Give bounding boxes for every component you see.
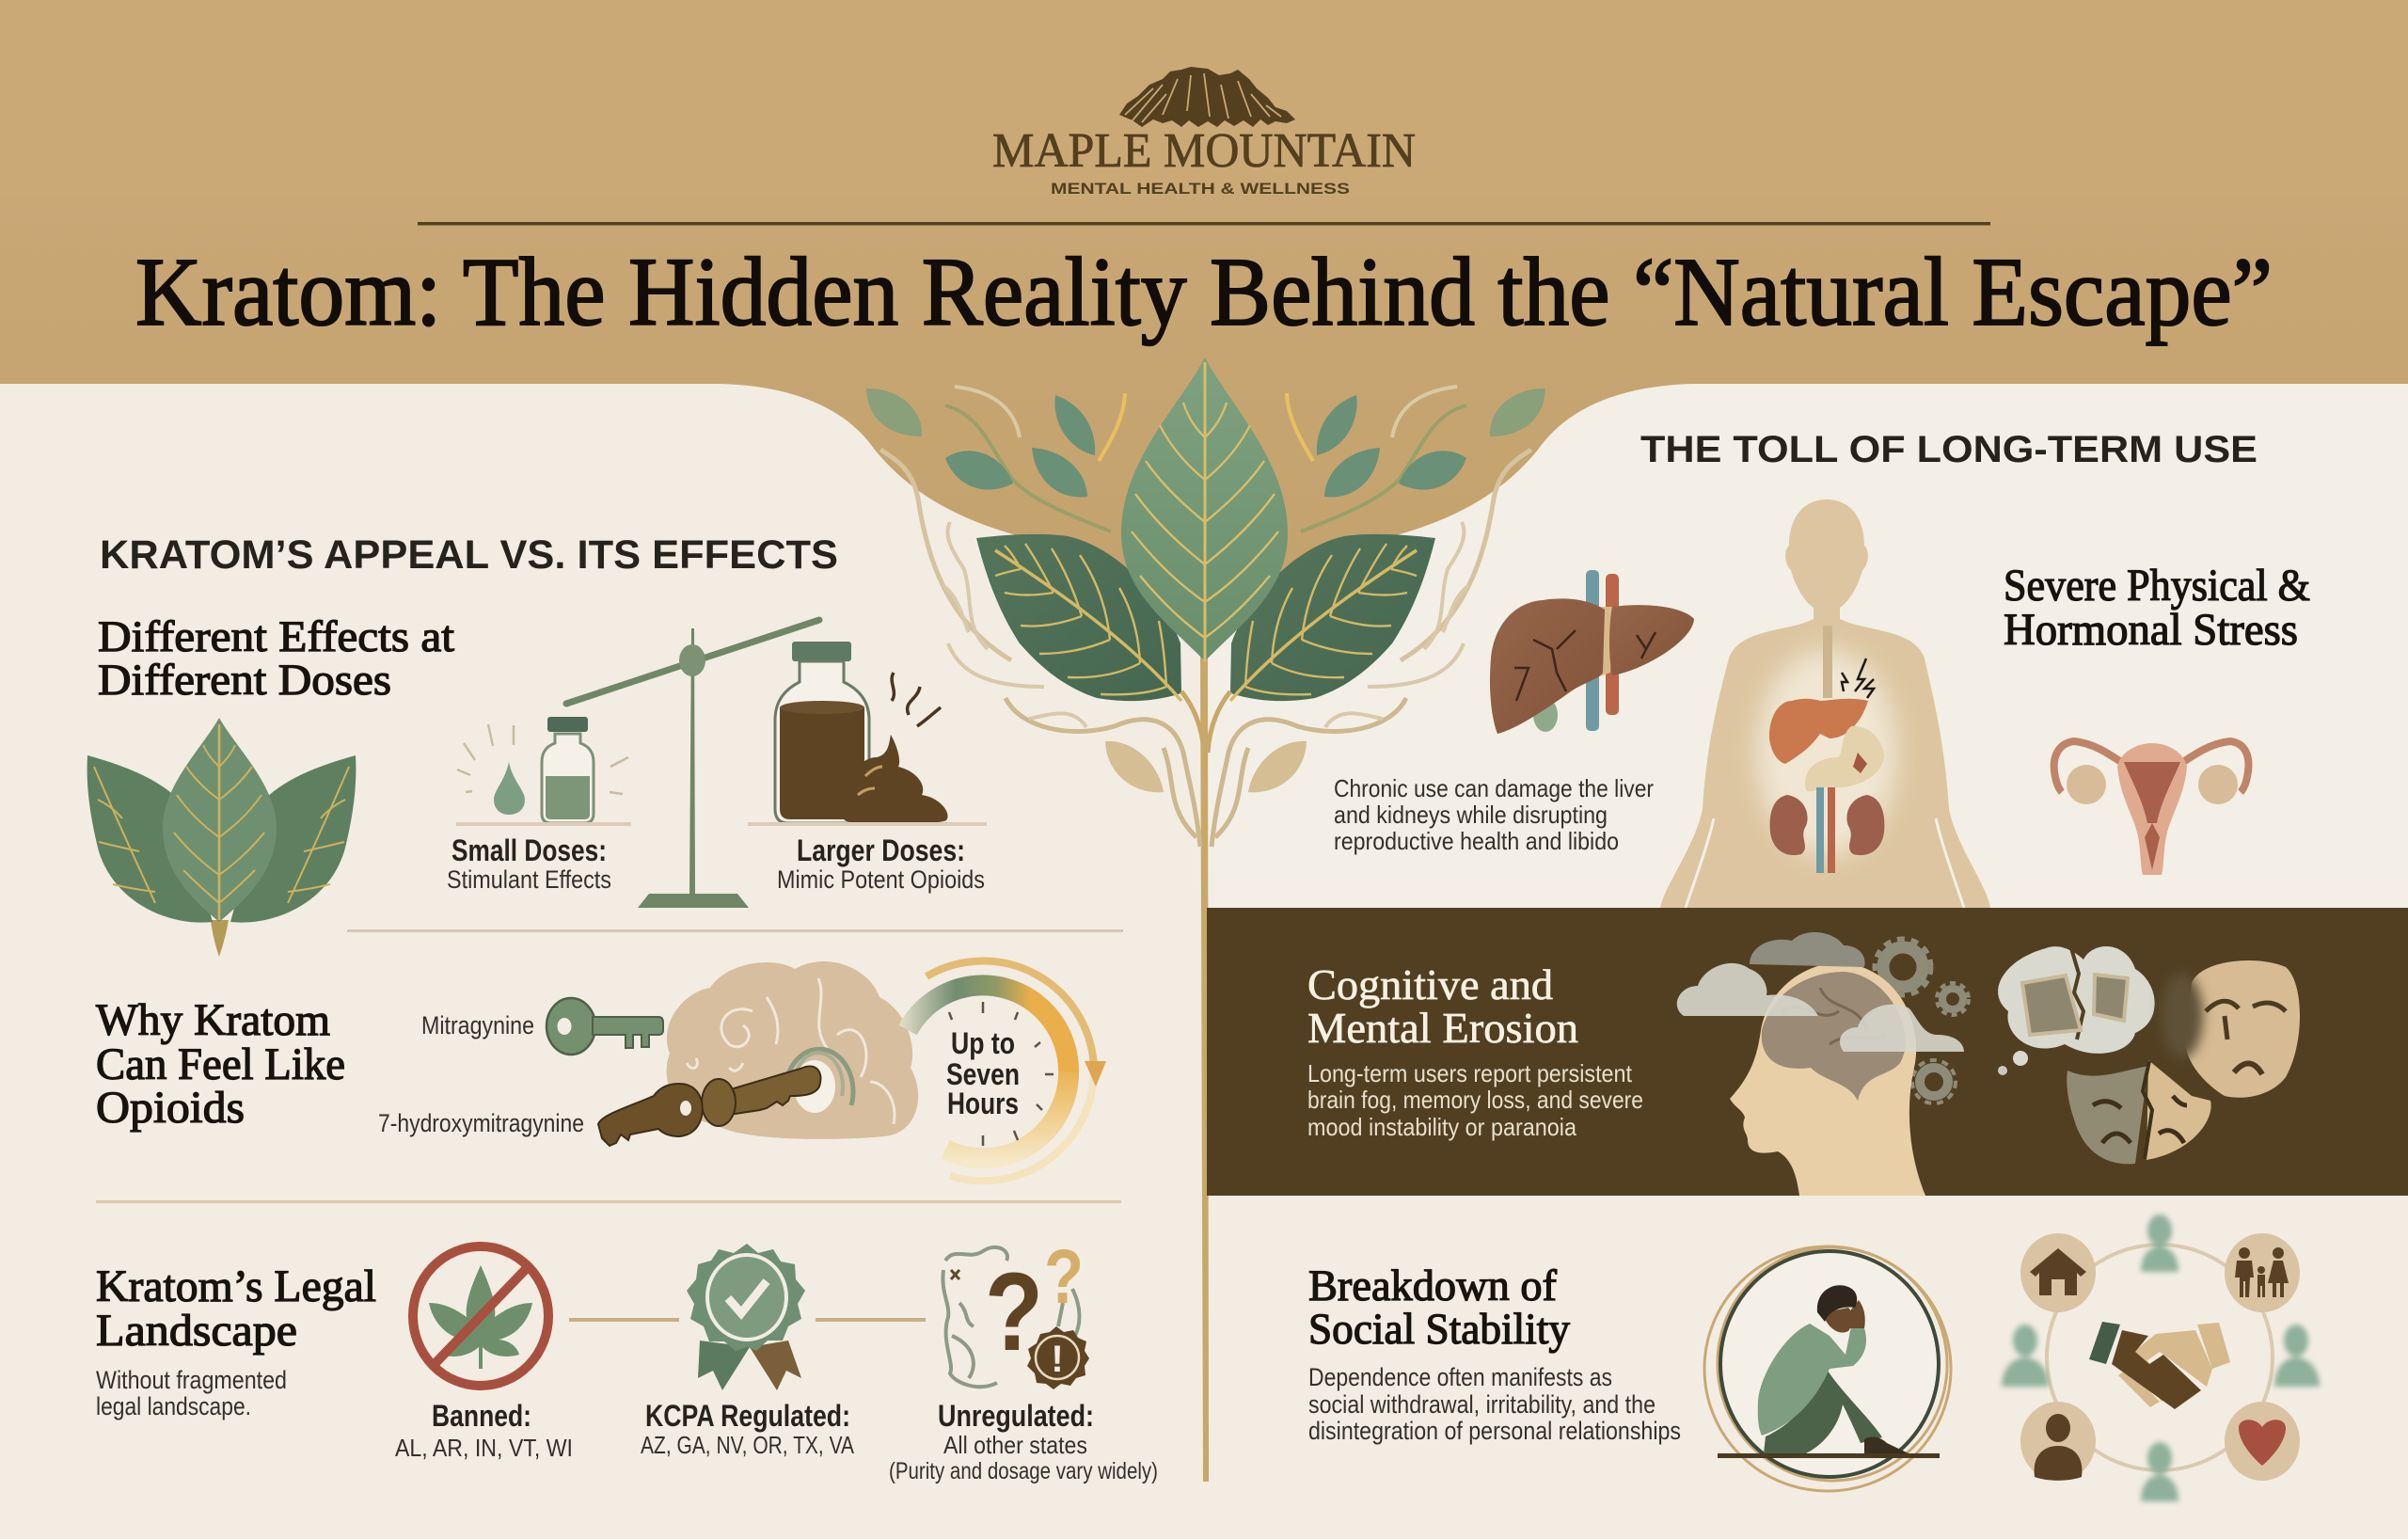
- panel: upper right background: [1207, 376, 2408, 908]
- icon: brain: [667, 961, 918, 1139]
- icon: gears: [1875, 939, 1969, 1103]
- icon: stomach: [1805, 726, 1884, 791]
- icon: sad masks: [2067, 960, 2300, 1164]
- stem branches to dark leaves: [1181, 691, 1230, 753]
- panel: header band with curved lower edge: [0, 0, 2408, 602]
- text: legal note: [96, 1366, 287, 1420]
- heading: severe physical: Hormonal Stress: [2004, 605, 2298, 655]
- central plant illustration: [866, 357, 1545, 1482]
- label: banned: Banned:: [432, 1399, 531, 1433]
- icon: body silhouette with organs: [1660, 500, 1990, 908]
- label: larger doses: Mimic Potent Opioids: [777, 865, 985, 894]
- heading: why kratom: Opioids: [96, 1083, 245, 1133]
- text: cognitive body: mood instability or paranoia: [1307, 1113, 1576, 1141]
- icon: social network ring: [2002, 1214, 2320, 1501]
- panel: legal landscape: [96, 1234, 1158, 1484]
- icon: kidneys: [1770, 795, 1808, 855]
- icon: mountain: [1119, 67, 1295, 127]
- text: cognitive body: [1307, 1059, 1643, 1141]
- panel: cognitive and mental erosion: [1207, 908, 2408, 1196]
- icon: unregulated question marks: !: [1051, 1339, 1064, 1380]
- icon: green key: [547, 998, 663, 1055]
- label: mitragynine: Mitragynine: [421, 1011, 534, 1039]
- heading: why kratom: [96, 995, 345, 1133]
- heading: severe physical: Severe Physical &: [2004, 561, 2310, 611]
- label: small doses: Small Doses:: [452, 833, 607, 867]
- heading: legal landscape: [96, 1261, 376, 1356]
- text: chronic use: [1334, 774, 1654, 855]
- icon: person: [2020, 1402, 2096, 1481]
- icon: isolated person in rings: [1703, 1232, 1962, 1496]
- logo: Maple Mountain: [992, 67, 1416, 198]
- heading: why kratom: Why Kratom: [96, 995, 330, 1045]
- heading: different effects: [98, 612, 454, 705]
- text: dependence: social withdrawal, irritability, and the: [1308, 1390, 1656, 1419]
- dark leaf left: [976, 534, 1181, 701]
- text: chronic use: reproductive health and libido: [1334, 827, 1619, 855]
- text: cognitive body: Long-term users report persistent: [1307, 1059, 1633, 1087]
- icon: banned leaf: [413, 1246, 548, 1386]
- icon: unregulated question marks: [943, 1234, 1089, 1389]
- heading: different effects: Different Doses: [98, 656, 391, 705]
- icon: three leaves: [87, 718, 356, 957]
- main stem: [1200, 649, 1209, 1482]
- panel: severe physical stress: [1334, 500, 2310, 908]
- tagline: MENTAL HEALTH & WELLNESS: [1051, 180, 1350, 198]
- tan roots left: [880, 450, 1200, 847]
- icon: clock arc, up to seven hours: Up to: [951, 1026, 1015, 1060]
- icon: family: [2225, 1233, 2300, 1312]
- icon: small dose vial and drop: [456, 717, 631, 826]
- icon: brown key outside: [598, 1084, 703, 1146]
- text: dependence: Dependence often manifests as: [1308, 1363, 1612, 1391]
- text: legal note: legal landscape.: [96, 1392, 251, 1420]
- icon: handshake: [2089, 1322, 2230, 1409]
- icon: reproductive system: [2054, 741, 2248, 875]
- icon: fog clouds: [1677, 932, 1964, 1052]
- heading: breakdown: Social Stability: [1308, 1305, 1570, 1354]
- icon: clock arc, up to seven hours: [908, 961, 1106, 1181]
- label: unregulated: All other states: [943, 1431, 1087, 1459]
- label: banned: AL, AR, IN, VT, WI: [395, 1434, 573, 1462]
- icon: head profile with brain: [1730, 962, 1925, 1196]
- heading: severe physical: [2004, 561, 2310, 655]
- label: unregulated: (Purity and dosage vary widely): [889, 1458, 1158, 1484]
- icon: large dose bottle and pile: [748, 642, 987, 826]
- text: cognitive body: brain fog, memory loss, and severe: [1307, 1086, 1643, 1114]
- icon: unregulated question marks: ?: [985, 1250, 1043, 1374]
- label: unregulated: Unregulated:: [938, 1399, 1094, 1433]
- heading: cognitive: Mental Erosion: [1307, 1004, 1578, 1052]
- heading: legal landscape: Landscape: [96, 1306, 297, 1356]
- label: 7-hydroxymitragynine: 7-hydroxymitragynine: [378, 1109, 584, 1137]
- dark leaf right: [1230, 534, 1435, 701]
- label: small doses: [447, 833, 611, 894]
- panel: different doses: [87, 612, 987, 957]
- tan roots right: [1212, 450, 1531, 847]
- text: chronic use: Chronic use can damage the liver: [1334, 774, 1654, 802]
- label: KCPA regulated: AZ, GA, NV, OR, TX, VA: [641, 1431, 855, 1459]
- icon: KCPA badge: [687, 1244, 805, 1390]
- icon: balance scale: [566, 620, 819, 908]
- text: legal note: Without fragmented: [96, 1366, 287, 1394]
- title: Kratom: The Hidden Reality Behind the “Natural Escape”: [135, 238, 2273, 346]
- icon: damaged liver: [1490, 570, 1694, 734]
- heading: cognitive: Cognitive and: [1307, 960, 1553, 1008]
- icon: brown key in lock: [702, 1066, 820, 1126]
- icon: lightning bolts: [1842, 658, 1874, 698]
- icon: clock arc, up to seven hours: Hours: [947, 1087, 1019, 1120]
- icon: clock arc, up to seven hours: Seven: [946, 1057, 1020, 1091]
- label: unregulated: [889, 1399, 1158, 1484]
- heading: breakdown: Breakdown of: [1308, 1261, 1557, 1310]
- lower tan leaf left: [1105, 741, 1164, 792]
- label: banned: [395, 1399, 573, 1462]
- text: dependence: [1308, 1363, 1681, 1445]
- heading: Kratom's appeal vs its effects: KRATOM’S APPEAL VS. ITS EFFECTS: [100, 532, 838, 578]
- label: larger doses: Larger Doses:: [797, 833, 965, 867]
- text: chronic use: and kidneys while disrupting: [1334, 801, 1608, 829]
- heading: the toll of long-term use: THE TOLL OF LONG-TERM USE: [1640, 429, 2258, 470]
- text: dependence: disintegration of personal relationships: [1308, 1417, 1681, 1445]
- icon: house: [2020, 1233, 2096, 1312]
- figure: [1764, 1371, 1882, 1453]
- icon: broken memory thought bubble: [1998, 946, 2155, 1075]
- lower tan leaf right: [1248, 741, 1307, 792]
- panel: breakdown of social stability: [1308, 1214, 2320, 1501]
- blurred people: [2002, 1214, 2320, 1501]
- icon: heart: [2225, 1402, 2300, 1481]
- icon: unregulated question marks: ?: [1044, 1234, 1084, 1320]
- label: KCPA regulated: KCPA Regulated:: [645, 1399, 850, 1433]
- panel: why kratom feels like opioids: [96, 961, 1106, 1181]
- header rule: [418, 222, 1990, 226]
- label: small doses: Stimulant Effects: [447, 865, 611, 894]
- heading: breakdown: [1308, 1261, 1570, 1354]
- heading: legal landscape: Kratom’s Legal: [96, 1261, 376, 1311]
- heading: cognitive: [1307, 960, 1578, 1052]
- small branch and leaves left: [866, 387, 1125, 532]
- heading: different effects: Different Effects at: [98, 612, 454, 661]
- label: larger doses: [777, 833, 985, 894]
- wordmark: MAPLE MOUNTAIN: [992, 124, 1416, 178]
- icon: small liver: [1769, 699, 1868, 764]
- heading: why kratom: Can Feel Like: [96, 1039, 345, 1089]
- label: KCPA regulated: [641, 1399, 855, 1459]
- center leaf: [1121, 357, 1288, 661]
- small branch and leaves right: [1287, 387, 1545, 532]
